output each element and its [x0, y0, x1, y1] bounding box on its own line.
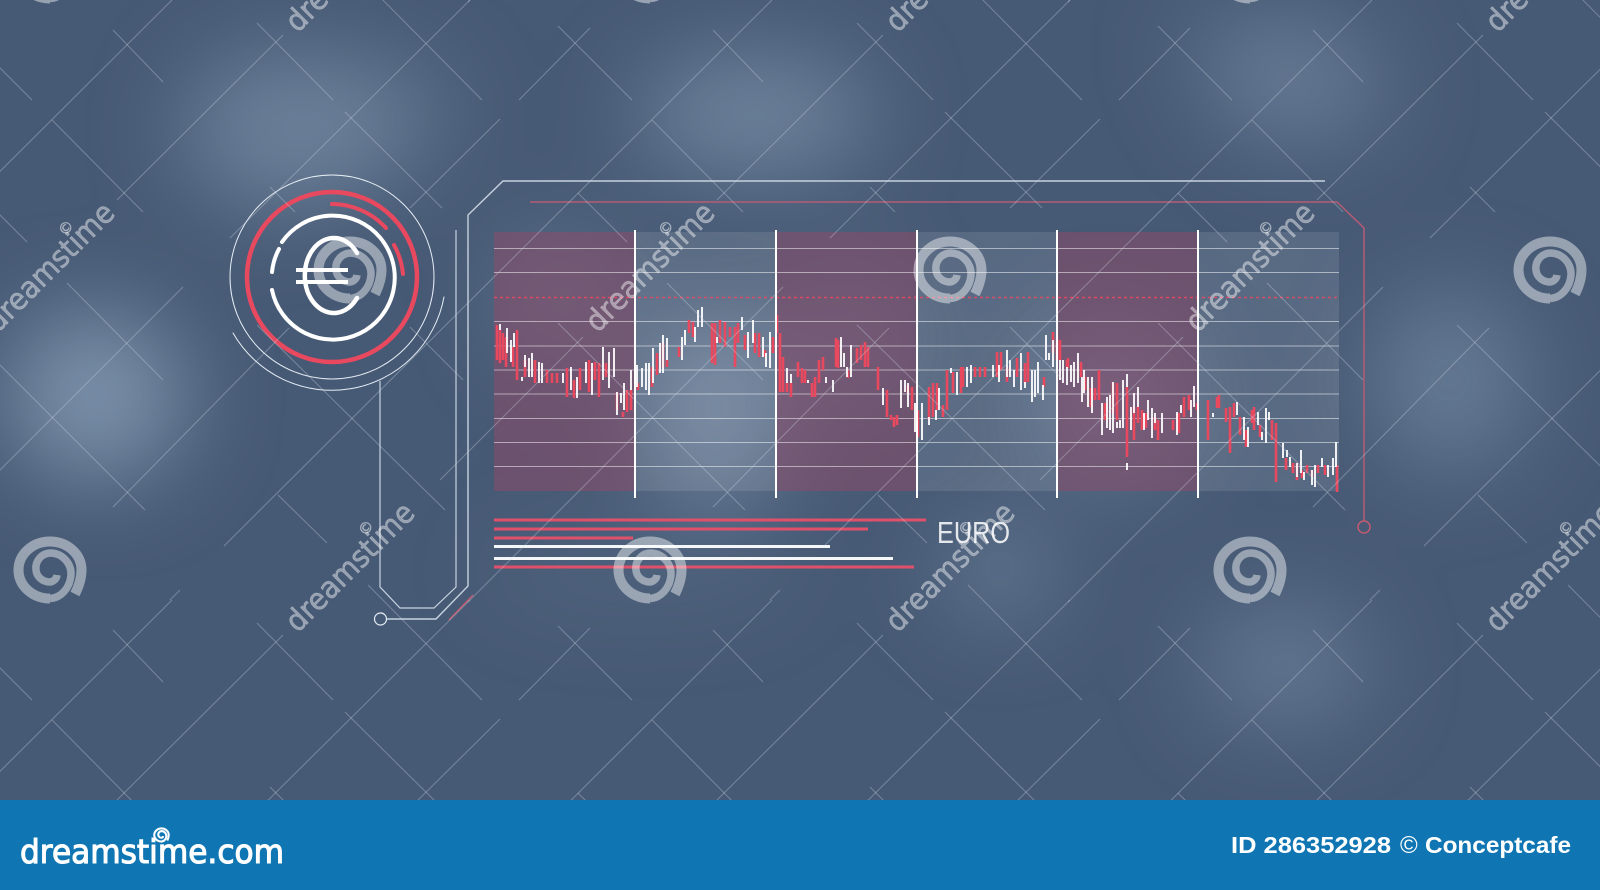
footer image credit: ID 286352928: [1231, 832, 1391, 858]
red end node right: [1358, 521, 1370, 533]
euro sign: [296, 238, 357, 313]
watermark text: ©: [954, 516, 978, 540]
footer image credit: ©: [1400, 832, 1418, 859]
watermark text: ©: [1554, 516, 1578, 540]
watermark text: ©: [354, 516, 378, 540]
red circuit frame right: [530, 202, 1364, 521]
circuit end node left: [374, 613, 386, 625]
outer thin arc: [233, 297, 444, 390]
red inner arcs: [332, 204, 403, 274]
chart bands: [494, 232, 1339, 491]
watermark text: ©: [654, 216, 678, 240]
watermark text: ©: [54, 216, 78, 240]
red ring: [247, 192, 417, 362]
label EURO: EURO: [937, 515, 1010, 550]
watermark text: dreamstime: [1179, 196, 1322, 339]
white ring broken: [272, 216, 395, 340]
footer image credit: [1231, 832, 1571, 859]
horizontal grid lines: [494, 248, 1339, 466]
watermark text: [0, 0, 1600, 639]
circuit connector from euro badge: [380, 230, 456, 608]
candlestick series: [497, 307, 1337, 492]
watermark text: ©: [1254, 216, 1278, 240]
watermark text: dreamstime: [879, 496, 1022, 639]
vertical period dividers: [635, 230, 1198, 498]
white candles: [500, 307, 1336, 487]
legend bars: [494, 518, 926, 568]
watermark text: dreamstime: [279, 496, 422, 639]
icon: logo spiral: [154, 828, 169, 842]
dashed red reference line: [494, 296, 1339, 298]
circuit frame top and left: [380, 181, 1325, 619]
icon: euro badge: [230, 175, 444, 390]
footer bar: [0, 800, 1600, 890]
watermark text: dreamstime: [579, 196, 722, 339]
footer logo text: dreamstime.com: [20, 832, 284, 871]
chart panel: [494, 230, 1339, 498]
watermark spirals: [18, 0, 1582, 598]
red candles: [497, 315, 1337, 492]
red accent stroke: [449, 595, 473, 620]
footer image credit: Conceptcafe: [1425, 832, 1571, 858]
outer thin ring: [230, 175, 434, 379]
